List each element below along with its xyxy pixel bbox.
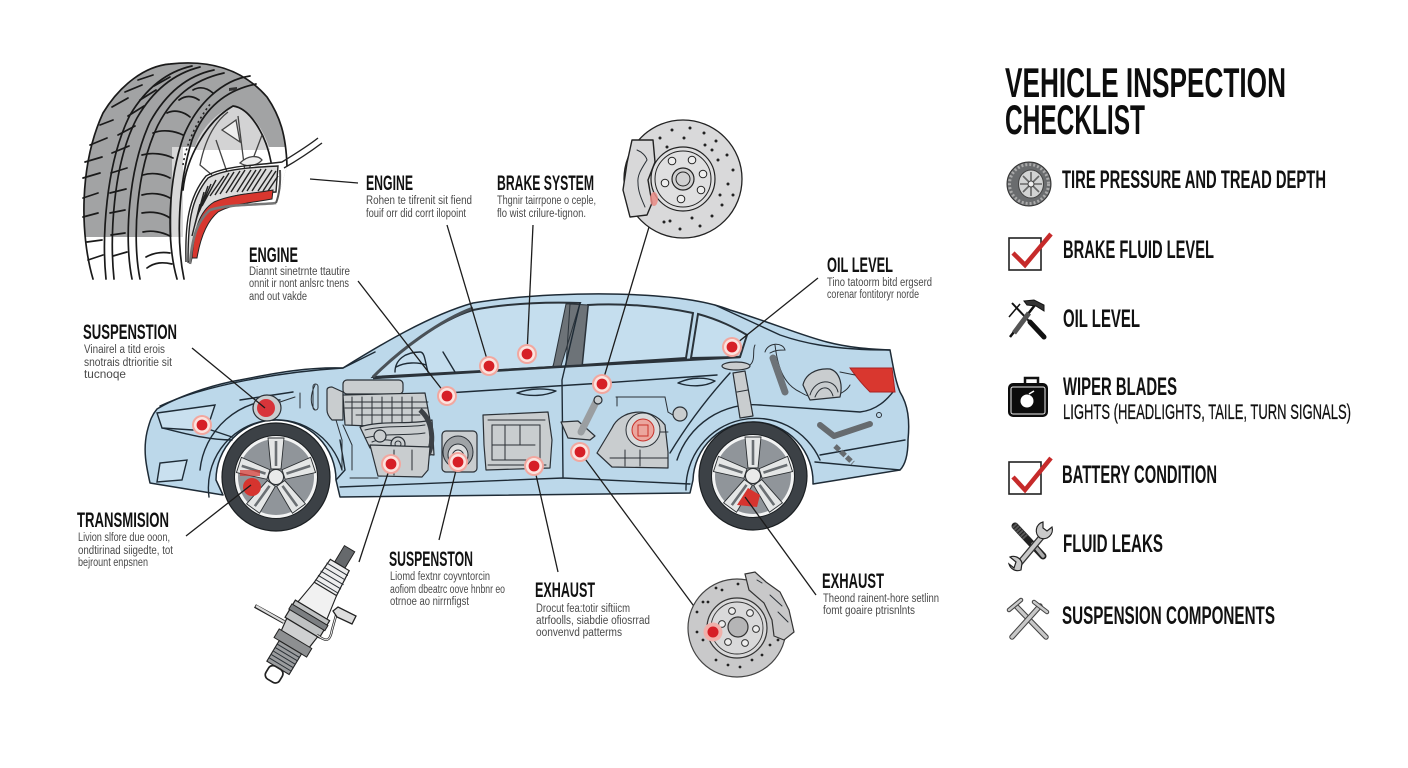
callout: exhaust right: EXHAUST	[822, 570, 884, 593]
part: muffler	[803, 369, 855, 400]
callout: transmission	[77, 509, 174, 569]
front wheel	[222, 423, 330, 531]
callout: transmission: bejrount enpsnen	[78, 557, 148, 569]
callout: exhaust right: fomt goaire ptrisnlnts	[823, 605, 915, 617]
leader lines	[186, 179, 818, 632]
callout: brake system: BRAKE SYSTEM	[497, 172, 594, 195]
car lines and door seams	[160, 303, 905, 497]
callout: exhaust bottom: EXHAUST	[535, 579, 595, 602]
tire cross-section hatch	[186, 138, 322, 264]
item: brake fluid: BRAKE FLUID LEVEL	[1063, 236, 1214, 264]
callout: suspension left	[83, 321, 177, 381]
inspection markers	[192, 337, 742, 476]
part: engine	[327, 380, 434, 478]
callout: engine left: and out vakde	[249, 291, 307, 303]
item: tire pressure	[1007, 162, 1326, 206]
checklist title: CHECKLIST	[1005, 96, 1145, 143]
part: suspension fuzzy hub	[253, 384, 318, 421]
part: rear strut	[722, 345, 755, 418]
callout: engine top: fouif orr did corrt ilopoint	[366, 208, 467, 220]
callout: suspension bottom: otrnoe ao nirrnfigst	[390, 596, 470, 608]
item: wiper blades and lights: WIPER BLADES	[1063, 373, 1177, 401]
callout: suspension left: SUSPENSTION	[83, 321, 177, 344]
callout: oil level	[827, 254, 932, 301]
item: brake fluid	[1009, 234, 1214, 270]
item: battery condition	[1009, 458, 1217, 494]
rim interior	[194, 106, 270, 150]
checklist title	[1005, 59, 1286, 143]
car body	[145, 294, 909, 497]
callout: brake system: Thgnir tairrpone o ceple,	[497, 195, 596, 207]
callout: exhaust bottom: Drocut fea:totir siftiicm	[536, 603, 630, 615]
brake highlight front	[240, 470, 261, 496]
caliper	[623, 140, 655, 217]
part: gearbox	[597, 397, 687, 468]
part: alternator	[442, 431, 477, 472]
callout: engine left	[249, 244, 350, 303]
callout: suspension left: tucnoqe	[84, 369, 126, 381]
item: suspension components	[1009, 600, 1275, 637]
fog lamp	[157, 460, 187, 482]
illustration: cutaway tire	[82, 62, 322, 280]
item: fluid leaks	[1009, 522, 1163, 571]
callout: exhaust right	[822, 570, 939, 617]
callout: suspension bottom: aofiom dbeatrc oove hnbnr eo	[390, 584, 505, 596]
headlight	[157, 405, 215, 430]
callout: transmission: Livion slfore due ooon,	[78, 532, 170, 544]
panel: checklist	[1005, 59, 1351, 637]
illustration: spark plug	[252, 538, 368, 692]
callout: oil level: Tino tatoorm bitd ergserd	[827, 277, 932, 289]
item: oil level	[1009, 300, 1140, 337]
taillight	[850, 368, 895, 392]
item: battery condition: BATTERY CONDITION	[1062, 461, 1217, 489]
callout: brake system: flo wist crilure-tignon.	[497, 208, 586, 220]
callout: oil level: corenar fontitoryr norde	[827, 289, 919, 301]
callout: transmission: ondtirinad siigedte, tot	[78, 545, 174, 557]
callout: engine top: Rohen te tifrenit sit fiend	[366, 195, 472, 207]
illustration: lower brake disc	[688, 572, 794, 677]
callout: exhaust bottom: atrfoolls, siabdie ofiosrrad	[536, 615, 650, 627]
part: transmission	[483, 412, 552, 470]
callout: suspension bottom: Liomd fextnr coyvntorcin	[390, 571, 490, 583]
item: oil level: OIL LEVEL	[1063, 305, 1140, 333]
illustration: upper brake disc	[623, 120, 742, 238]
callout: oil level: OIL LEVEL	[827, 254, 893, 277]
callout: suspension left: snotrais dtrioritie sit	[84, 357, 173, 369]
callout: engine left: ENGINE	[249, 244, 298, 267]
callout: suspension left: Vinairel a titd erois	[84, 344, 165, 356]
callout: exhaust bottom: oonvenvd patterms	[536, 627, 622, 639]
callout: brake system	[497, 172, 596, 220]
callout: suspension bottom: SUSPENSTON	[389, 548, 473, 571]
brake highlight rear	[737, 488, 760, 507]
item: fluid leaks: FLUID LEAKS	[1063, 530, 1163, 558]
callout: transmission: TRANSMISION	[77, 509, 169, 532]
part: rear suspension arm	[765, 344, 850, 398]
callout: engine left: onnit ir nont anlsrc tnens	[249, 278, 349, 290]
callout: suspension bottom	[389, 548, 505, 608]
part: exhaust pipe	[820, 412, 882, 463]
callout: engine left: Diannt sinetrnte ttautire	[249, 266, 350, 278]
callout: exhaust right: Theond rainent-hore setlinn	[823, 593, 939, 605]
caliper	[745, 572, 794, 640]
car illustration	[145, 294, 909, 531]
item: suspension components: SUSPENSION COMPONENTS	[1062, 602, 1275, 630]
part: shift lever	[561, 396, 602, 440]
item: wiper blades and lights	[1008, 373, 1351, 424]
car windows	[373, 303, 747, 378]
callout: engine top	[366, 172, 472, 220]
callout: engine top: ENGINE	[366, 172, 413, 195]
rear wheel	[699, 422, 807, 530]
callout: exhaust bottom	[535, 579, 650, 639]
